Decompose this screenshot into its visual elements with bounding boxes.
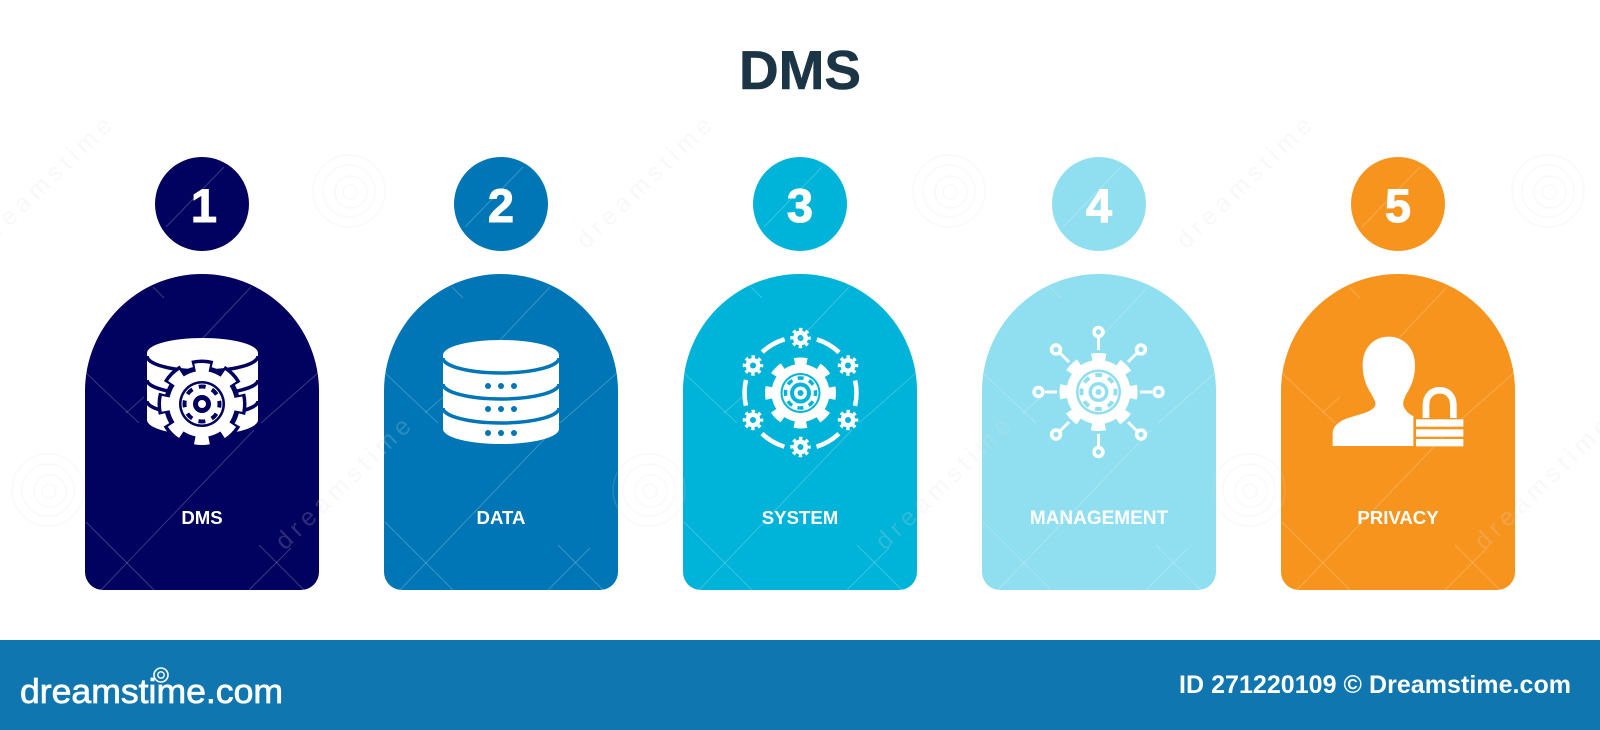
step 1 number badge: 1 bbox=[191, 179, 217, 232]
icon: gear network bbox=[744, 330, 856, 456]
watermark overlay: dreamstime bbox=[571, 111, 717, 254]
label: PRIVACY: PRIVACY bbox=[1357, 507, 1439, 528]
watermark overlay: dreamstime bbox=[1171, 111, 1317, 254]
icon: database with gear bbox=[147, 338, 258, 442]
watermark overlay: dreamstime bbox=[870, 412, 1016, 555]
step 5 number badge bbox=[1351, 157, 1445, 251]
panel: DATA bbox=[384, 274, 618, 590]
step 2 number badge: 2 bbox=[488, 179, 514, 232]
panel: SYSTEM bbox=[683, 274, 917, 590]
step 5 number badge: 5 bbox=[1385, 179, 1411, 232]
icon: database bbox=[443, 340, 559, 444]
icon: gear hub with nodes bbox=[1034, 328, 1163, 456]
brand logo text: dreamstime.com bbox=[20, 673, 283, 711]
footer band bbox=[0, 640, 1600, 730]
title: DMS bbox=[739, 39, 861, 101]
label: MANAGEMENT: MANAGEMENT bbox=[1030, 508, 1169, 529]
step 4 number badge: 4 bbox=[1086, 179, 1112, 232]
step 4 number badge bbox=[1052, 157, 1146, 251]
label: SYSTEM: SYSTEM bbox=[762, 507, 838, 528]
panel: DMS bbox=[85, 274, 319, 590]
step 2 number badge bbox=[454, 157, 548, 251]
step 3 number badge: 3 bbox=[787, 179, 813, 232]
small gears bbox=[744, 330, 856, 456]
panel: PRIVACY bbox=[1281, 274, 1515, 590]
step 3 number badge bbox=[753, 157, 847, 251]
watermark overlay: dreamstime bbox=[270, 412, 416, 555]
label: DATA: DATA bbox=[477, 507, 525, 528]
step 1 number badge bbox=[155, 157, 249, 251]
panel: MANAGEMENT bbox=[982, 274, 1216, 590]
image id credit: ID 271220109 © Dreamstime.com bbox=[1179, 671, 1571, 699]
label: DMS: DMS bbox=[181, 507, 223, 528]
icon: person with padlock bbox=[1333, 337, 1463, 446]
watermark overlay bbox=[0, 111, 1600, 590]
